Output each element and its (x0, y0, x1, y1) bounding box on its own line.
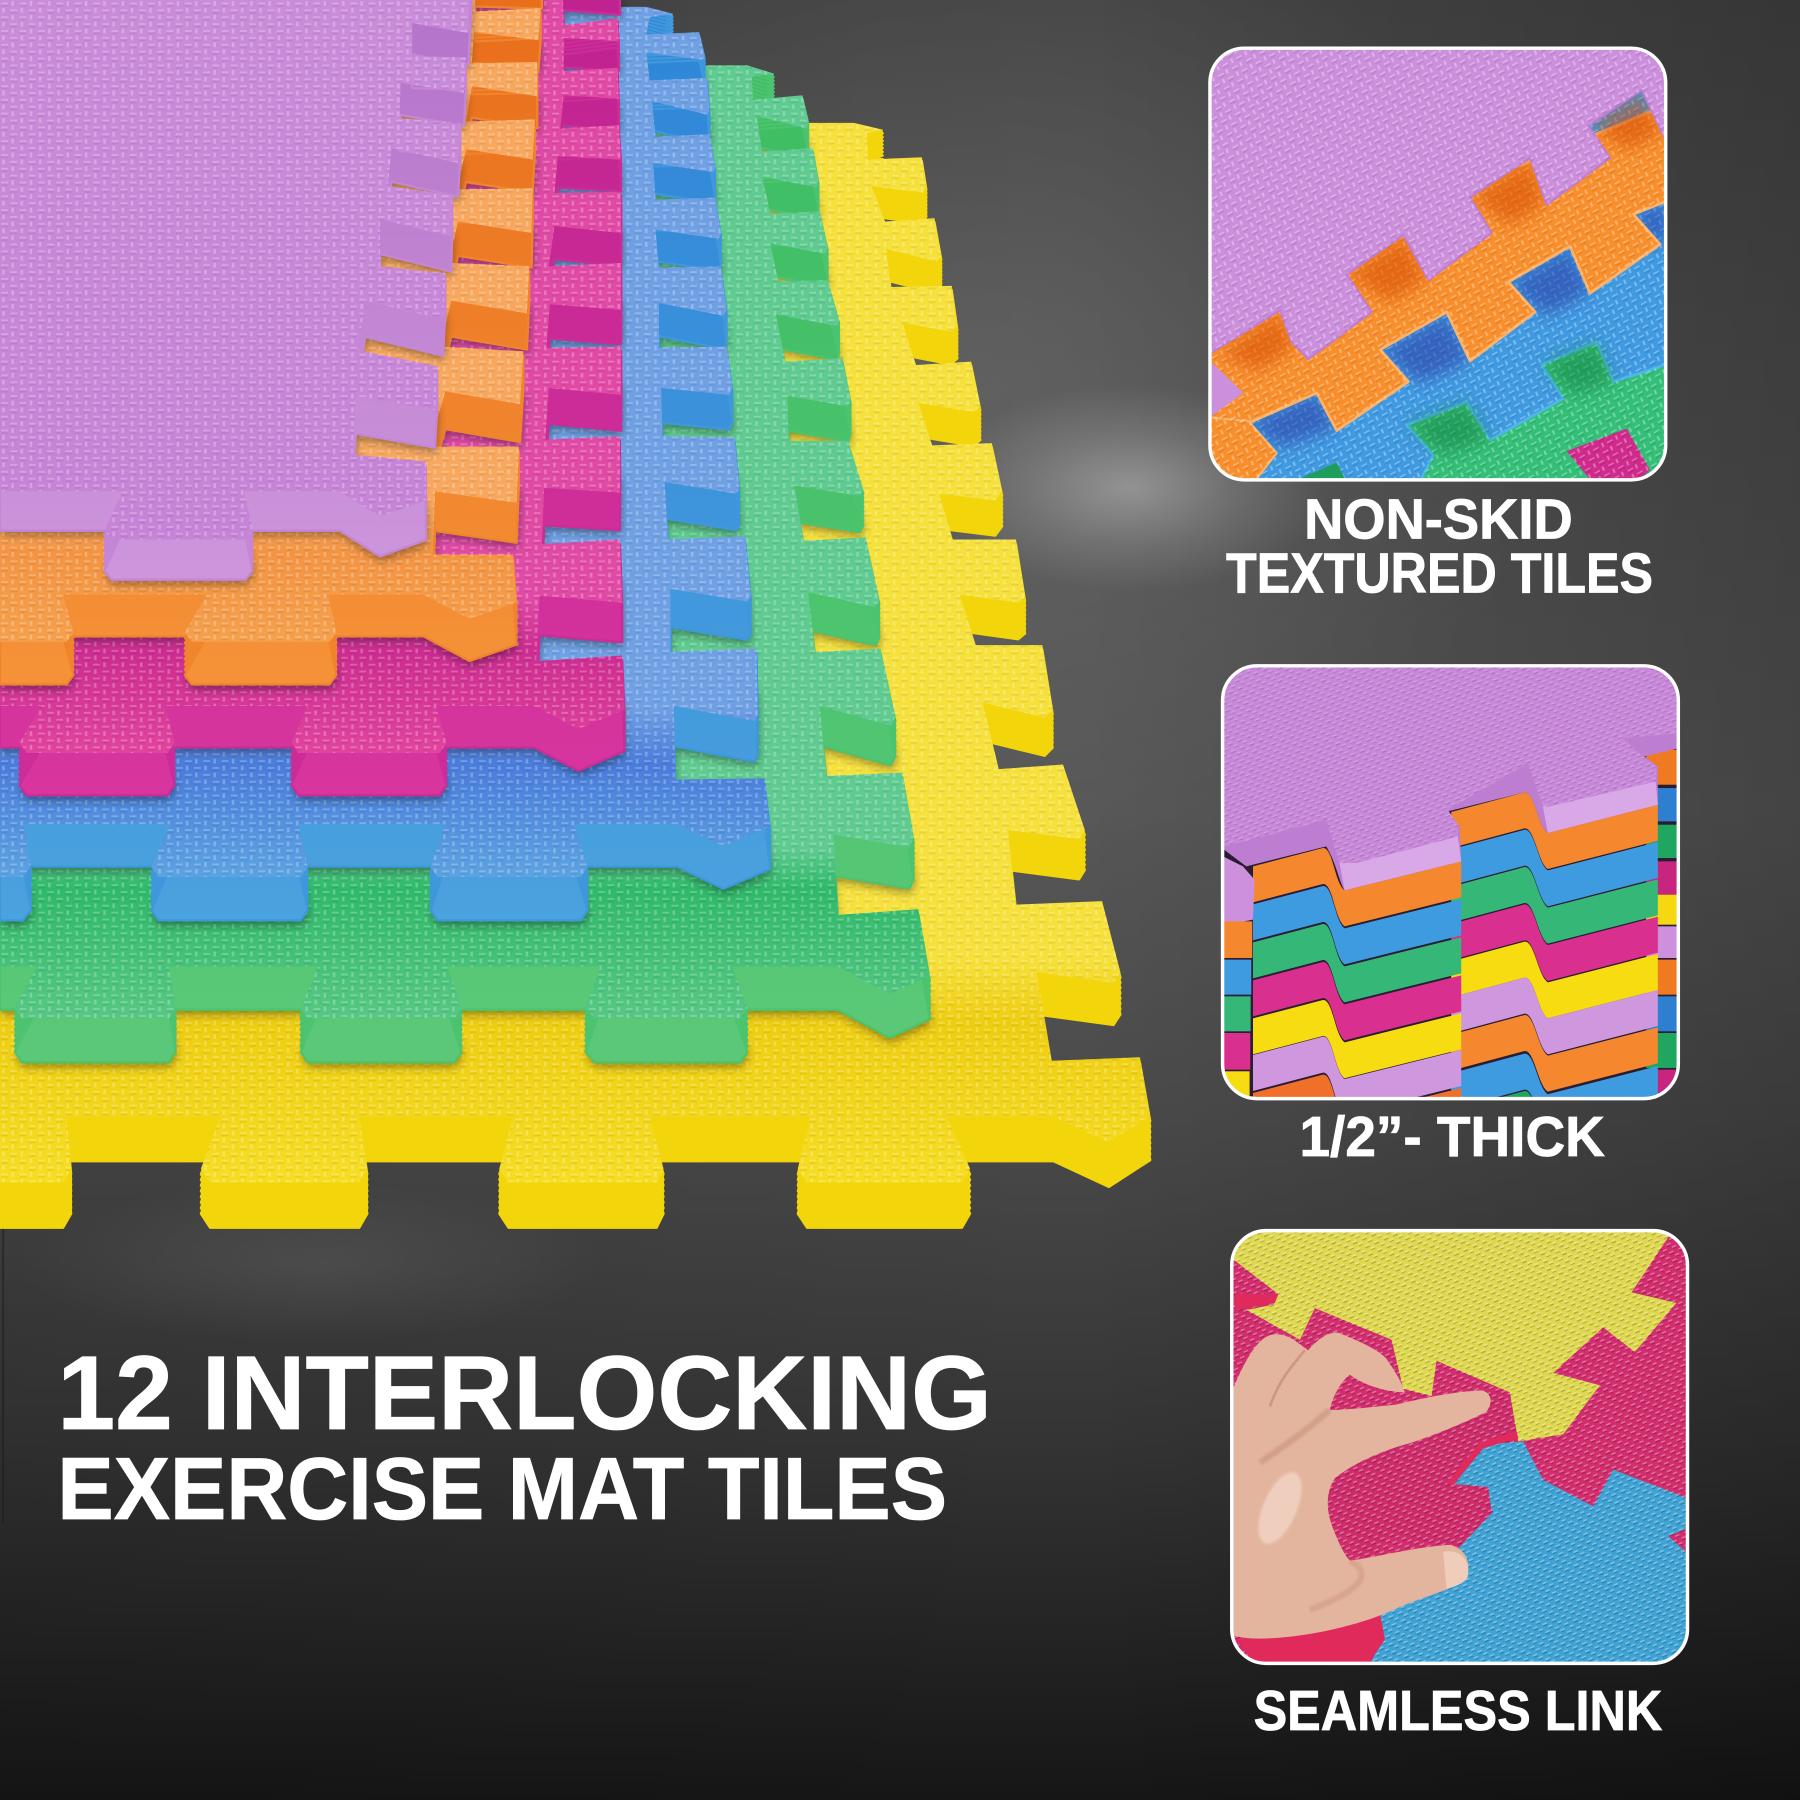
caption: non-skid textured tiles (1226, 487, 1653, 604)
orange tile (0, 0, 543, 689)
title: EXERCISE MAT TILES (57, 1439, 947, 1538)
main image: stacked foam mat tiles (0, 0, 1150, 1228)
photo: textured interlocking edges (1207, 45, 1670, 485)
yellow tile (0, 123, 1150, 1228)
caption: seamless link: SEAMLESS LINK (1254, 1679, 1663, 1742)
caption: non-skid textured tiles: NON-SKID (1304, 487, 1573, 550)
panel: seamless link (1230, 1227, 1693, 1666)
magenta tile (0, 0, 626, 800)
photo: stacked tile layers (1224, 668, 1677, 1097)
panel frame (1223, 666, 1678, 1099)
panel: non-skid textured tiles (1207, 45, 1670, 485)
caption: non-skid textured tiles: TEXTURED TILES (1226, 541, 1653, 604)
panel frame (1210, 48, 1666, 480)
blue tile (0, 7, 771, 925)
panel frame (1232, 1231, 1688, 1663)
green tile (0, 65, 931, 1067)
title (57, 1335, 992, 1538)
icon: hand (1230, 1332, 1491, 1639)
purple tile (0, 0, 473, 584)
caption: half inch thick: 1/2”- THICK (1299, 1105, 1605, 1168)
photo: hand joining tiles (1230, 1227, 1693, 1666)
title: 12 INTERLOCKING (57, 1335, 992, 1452)
panel: half inch thick (1220, 664, 1680, 1100)
